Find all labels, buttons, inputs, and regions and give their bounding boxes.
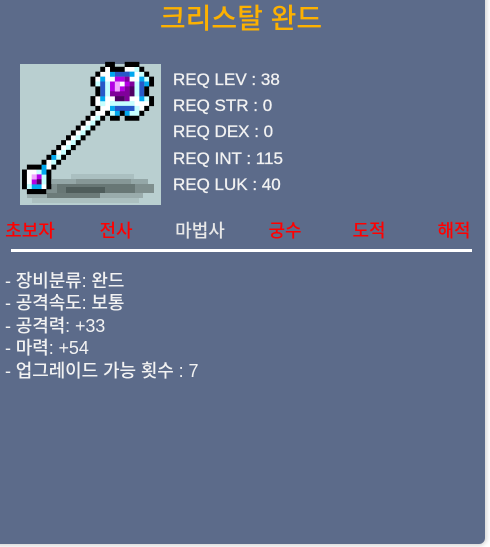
attack power: - 공격력: +33 (5, 316, 105, 336)
required level: REQ LEV : 38 (173, 70, 280, 89)
upgrade slots: - 업그레이드 가능 횟수 : 7 (5, 361, 198, 381)
class: beginner: 초보자 (5, 221, 55, 241)
class: thief: 도적 (352, 221, 386, 241)
class: pirate: 해적 (437, 221, 471, 241)
requirement stats (173, 70, 283, 194)
required intelligence: REQ INT : 115 (173, 149, 283, 168)
class availability row (5, 221, 471, 241)
equipment type: - 장비분류: 완드 (5, 271, 124, 291)
item icon: crystal wand (20, 62, 161, 205)
divider line (11, 249, 472, 252)
magic power: - 마력: +54 (5, 338, 89, 358)
class: magician: 마법사 (175, 221, 225, 241)
required luck: REQ LUK : 40 (173, 175, 281, 194)
item details list (5, 271, 198, 381)
class: warrior: 전사 (99, 221, 133, 241)
required strength: REQ STR : 0 (173, 96, 272, 115)
attack speed: - 공격속도: 보통 (5, 293, 124, 313)
class: archer: 궁수 (268, 221, 302, 241)
required dexterity: REQ DEX : 0 (173, 122, 273, 141)
title: 크리스탈 완드 (160, 3, 322, 34)
